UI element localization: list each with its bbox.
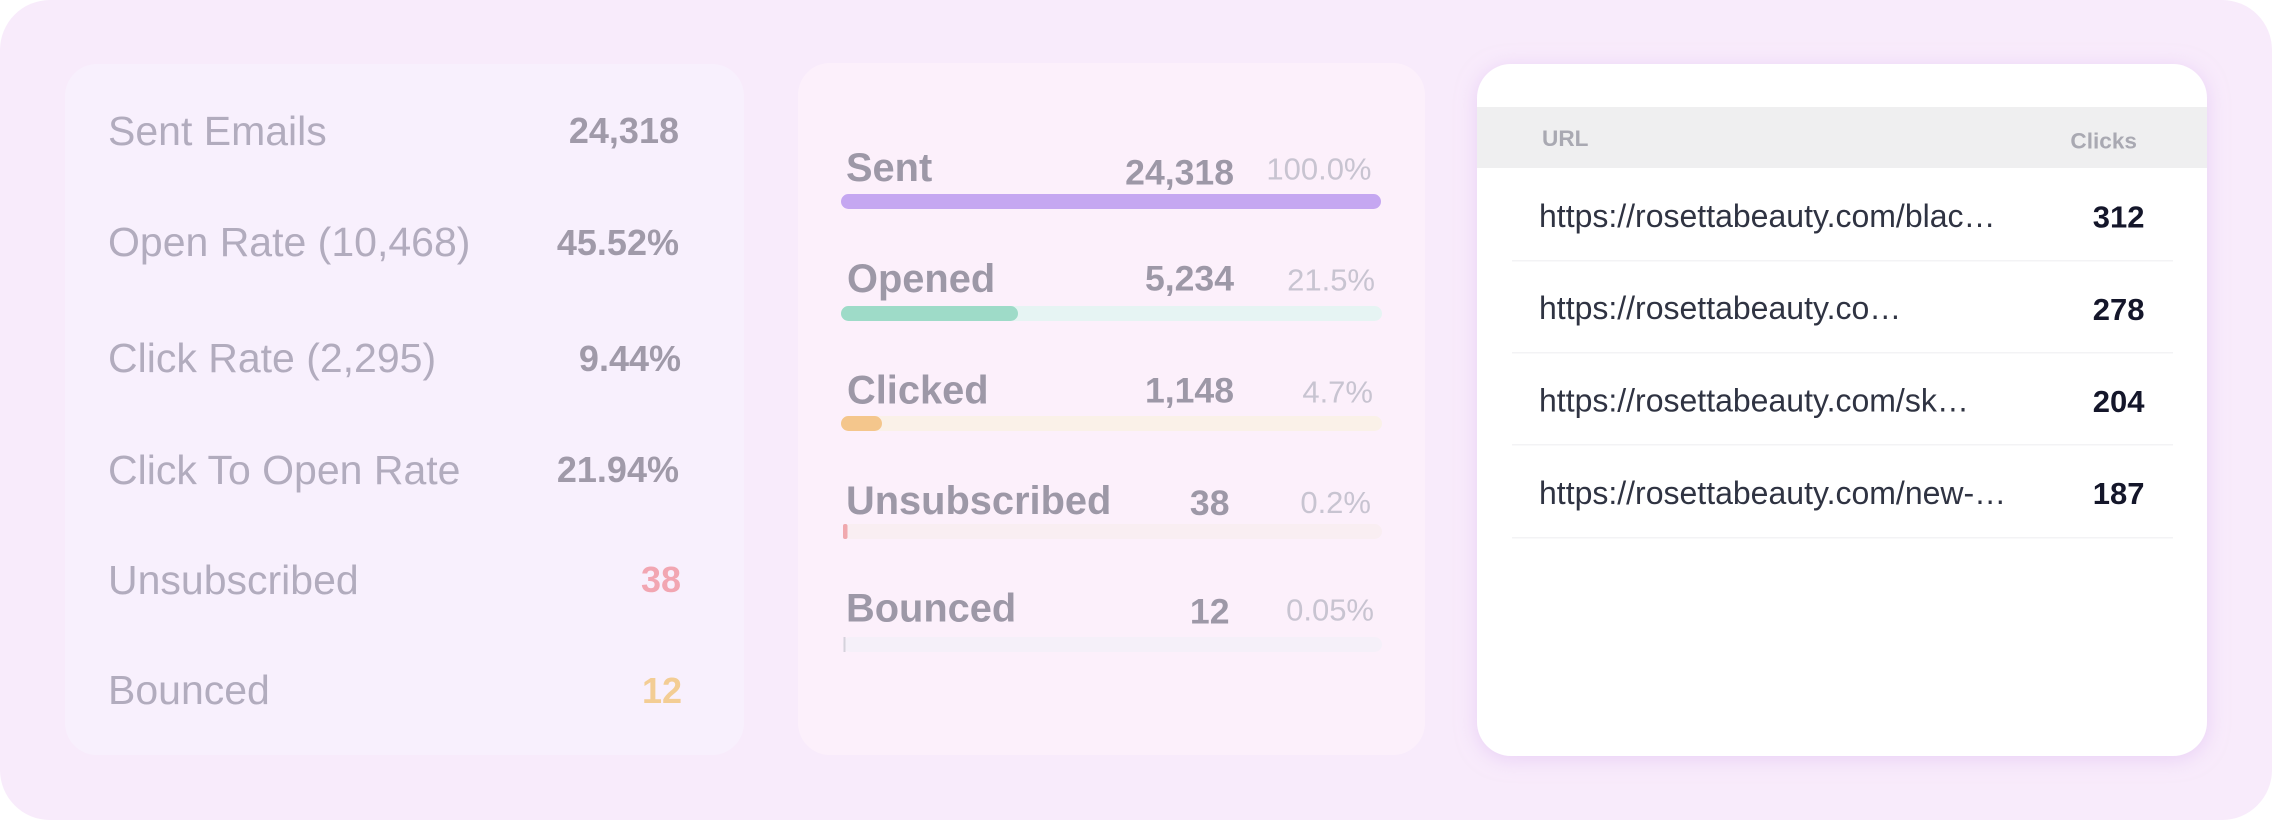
row: open rate: 45.52% xyxy=(557,222,679,263)
table row 4 xyxy=(1512,475,2173,538)
table header xyxy=(1477,107,2207,168)
table row 2: https://rosettabeauty.co… xyxy=(1539,290,1901,326)
row: click to open rate xyxy=(108,447,679,493)
table row 4: 187 xyxy=(2093,476,2144,511)
bar row: sent: Sent xyxy=(846,146,932,190)
bar row: bounced: Bounced xyxy=(846,586,1016,630)
row: click rate: Click Rate (2,295) xyxy=(108,335,436,381)
bar row: sent: 100.0% xyxy=(1266,152,1372,186)
table row 1: https://rosettabeauty.com/blac… xyxy=(1539,198,1996,234)
row: click rate: 9.44% xyxy=(579,338,681,379)
row: bounced: Bounced xyxy=(108,667,270,713)
bar row: clicked: 4.7% xyxy=(1302,374,1373,410)
table row 3: https://rosettabeauty.com/sk… xyxy=(1539,382,1969,418)
table row 1 xyxy=(1512,198,2173,262)
panel: top links table xyxy=(1477,64,2207,756)
bar row: sent: 24,318 xyxy=(1125,152,1234,192)
table header: URL xyxy=(1542,126,1589,151)
bar row: unsubscribed: 0.2% xyxy=(1300,485,1371,520)
row: unsubscribed: Unsubscribed xyxy=(108,557,359,603)
panel: email summary xyxy=(65,64,744,755)
table row 3: 204 xyxy=(2093,384,2145,419)
bar row: opened xyxy=(841,257,1382,321)
bar row: unsubscribed: 38 xyxy=(1190,483,1230,523)
bar row: sent xyxy=(841,146,1381,209)
row: unsubscribed: 38 xyxy=(641,559,681,600)
row: bounced: 12 xyxy=(642,670,682,711)
bar row: clicked: 1,148 xyxy=(1145,370,1234,410)
row: sent emails: Sent Emails xyxy=(108,108,327,154)
table row 4: https://rosettabeauty.com/new-… xyxy=(1539,475,2006,511)
row: click to open rate: 21.94% xyxy=(557,449,679,490)
row: click rate xyxy=(108,335,681,381)
table row 1: 312 xyxy=(2093,200,2144,234)
bar row: clicked: Clicked xyxy=(847,368,989,412)
row: open rate: Open Rate (10,468) xyxy=(108,219,470,265)
table row 2 xyxy=(1512,290,2173,354)
table row 3 xyxy=(1512,382,2173,446)
bar row: clicked xyxy=(841,368,1382,431)
row: bounced xyxy=(108,667,682,713)
bar row: bounced xyxy=(843,586,1382,652)
table row 2: 278 xyxy=(2093,292,2144,327)
row: open rate xyxy=(108,219,679,265)
row: unsubscribed xyxy=(108,557,681,603)
bar row: bounced: 0.05% xyxy=(1286,592,1374,628)
bar row: opened: 21.5% xyxy=(1287,262,1375,298)
bar row: opened: Opened xyxy=(847,257,995,301)
bar row: unsubscribed: Unsubscribed xyxy=(846,479,1111,523)
row: click to open rate: Click To Open Rate xyxy=(108,447,460,493)
bar row: bounced: 12 xyxy=(1190,592,1230,632)
bar row: unsubscribed xyxy=(843,479,1382,539)
panel: funnel bars xyxy=(798,63,1425,755)
row: sent emails xyxy=(108,108,679,154)
table header: Clicks xyxy=(2070,128,2137,154)
row: sent emails: 24,318 xyxy=(569,110,679,151)
bar row: opened: 5,234 xyxy=(1145,258,1234,298)
